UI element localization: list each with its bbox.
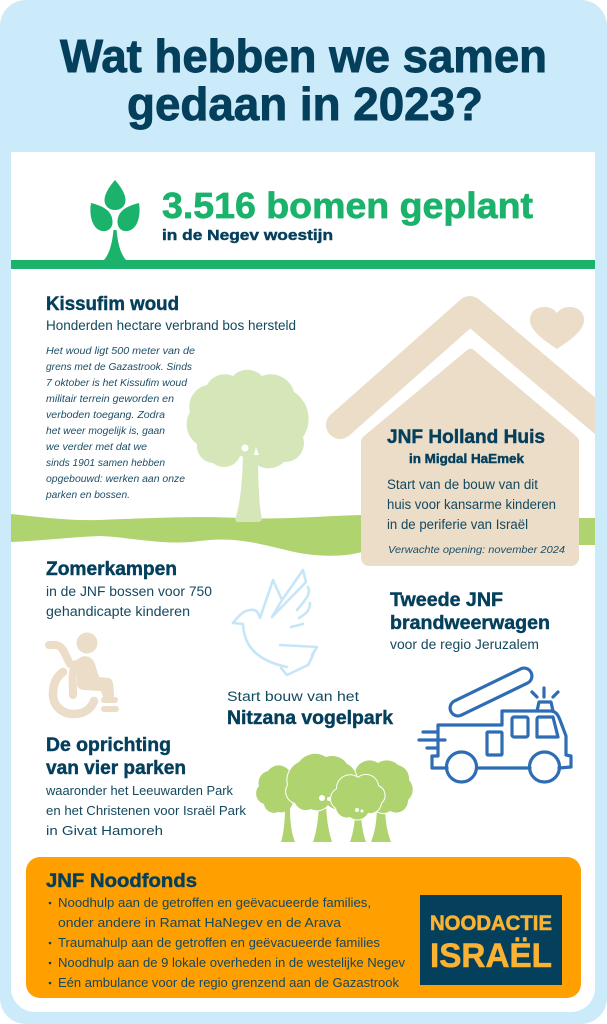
italic paragraph: opgebouwd: werken aan onze (46, 473, 185, 485)
illustration: big light tree (187, 370, 309, 522)
text block: parks: waaronder het Leeuwarden Park (45, 783, 233, 798)
badge: Noodactie Israël: NOODACTIE (430, 912, 552, 935)
bullet list: Eén ambulance voor de regio grenzend aan de Gazastrook (58, 975, 399, 990)
house body (361, 349, 579, 566)
text block: Zomerkampen: Zomerkampen (46, 559, 177, 580)
icon: heart (530, 307, 584, 349)
text block: Kissufim woud (45, 294, 296, 501)
subheading: Negev: in de Negev woestijn (162, 228, 333, 244)
text block: parks: van vier parken (46, 758, 186, 779)
heading: bomen geplant: 3.516 bomen geplant (162, 185, 533, 226)
text block: parks: en het Christenen voor Israël Park (46, 803, 246, 818)
title (60, 30, 547, 130)
heading: JNF Noodfonds (46, 871, 197, 892)
left tree (256, 765, 295, 842)
front tree (331, 775, 385, 842)
illustration: group of four trees (256, 754, 413, 842)
green hill band (11, 514, 595, 556)
title: Wat hebben we samen (60, 30, 547, 82)
text block: brandweerwagen: brandweerwagen (390, 613, 550, 634)
text block: brandweerwagen: Tweede JNF (390, 590, 503, 611)
badge: Noodactie Israël (420, 895, 562, 985)
text block: Nitzana vogelpark (227, 689, 393, 729)
text block: brandweerwagen: voor de regio Jeruzalem (390, 637, 539, 652)
text: JNF Holland Huis: in de periferie van Israël (387, 517, 528, 532)
heading: Kissufim woud (46, 294, 179, 315)
italic paragraph: 7 oktober is het Kissufim woud (46, 377, 188, 389)
bullet list: Noodhulp aan de getroffen en geëvacueerde families, (58, 895, 371, 910)
text block: brandweerwagen (390, 590, 550, 652)
italic paragraph: we verder met dat we (46, 441, 147, 453)
text block: Zomerkampen: gehandicapte kinderen (46, 604, 190, 619)
italic paragraph: sinds 1901 samen hebben (46, 457, 165, 469)
italic paragraph (45, 345, 195, 501)
subheading: Honderden hectare verbrand bos hersteld (46, 318, 296, 333)
text: JNF Holland Huis: in Migdal HaEmek (409, 451, 525, 466)
icon: dove (233, 570, 317, 675)
text: JNF Holland Huis: Start van de bouw van dit (387, 477, 538, 492)
text block: Nitzana vogelpark: Start bouw van het (227, 689, 359, 704)
italic paragraph: verboden toegang. Zodra (46, 409, 165, 421)
text: JNF Holland Huis (387, 427, 565, 556)
text: JNF Holland Huis: huis voor kansarme kinderen (387, 497, 556, 512)
text block: parks: in Givat Hamoreh (46, 823, 163, 838)
panel: JNF Noodfonds (26, 857, 581, 998)
icon: wheelchair (49, 632, 116, 714)
badge: Noodactie Israël: ISRAËL (430, 937, 552, 975)
italic paragraph: het weer mogelijk is, gaan (46, 425, 165, 437)
bullet list: Traumahulp aan de getroffen en geëvacueerde families (58, 935, 380, 950)
text block: parks: De oprichting (46, 735, 171, 756)
text: JNF Holland Huis: JNF Holland Huis (387, 427, 545, 448)
icon: fire truck (419, 676, 571, 782)
text block: Nitzana vogelpark: Nitzana vogelpark (227, 708, 393, 729)
text block: Zomerkampen (46, 559, 212, 619)
right tree (355, 760, 413, 842)
text block: parks (45, 735, 246, 838)
bullet list: Noodhulp aan de 9 lokale overheden in de westelijke Negev (58, 955, 405, 970)
icon: green sprout (90, 180, 140, 261)
middle tree (286, 754, 357, 842)
title: gedaan in 2023? (127, 78, 483, 130)
italic paragraph: grens met de Gazastrook. Sinds (46, 361, 193, 373)
house roof (340, 310, 607, 437)
italic paragraph: parken en bossen. (45, 489, 130, 501)
italic paragraph: Het woud ligt 500 meter van de (46, 345, 195, 357)
bullet list (49, 895, 405, 990)
text: JNF Holland Huis: Verwachte opening: november 2024 (388, 544, 565, 556)
text block: Zomerkampen: in de JNF bossen voor 750 (46, 584, 212, 599)
bullet list: onder andere in Ramat HaNegev en de Arava (58, 915, 342, 930)
section: trees planted (11, 180, 595, 269)
green ground line (11, 260, 595, 269)
illustration: house (340, 307, 607, 566)
italic paragraph: militair terrein geworden en (46, 393, 174, 405)
